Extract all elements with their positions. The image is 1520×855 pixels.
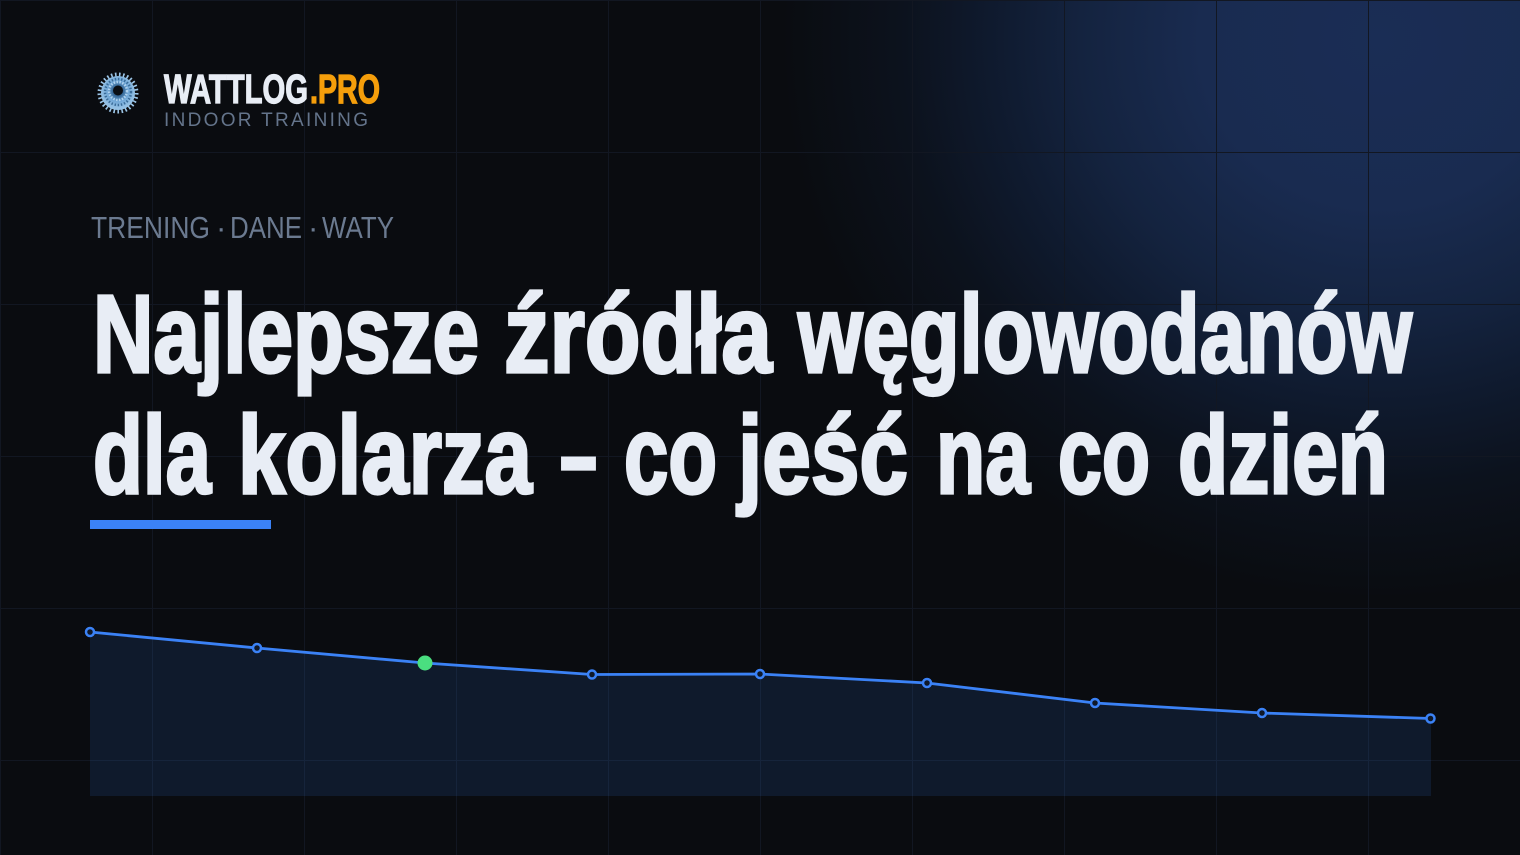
- title: na: [936, 394, 1031, 517]
- title: dzień: [1178, 394, 1388, 517]
- title: Najlepsze: [93, 273, 479, 396]
- logo tagline: INDOOR TRAINING: [164, 110, 368, 131]
- eyebrow: DANE: [230, 210, 302, 245]
- title: dla: [93, 394, 212, 517]
- eyebrow: ·: [216, 210, 226, 245]
- eyebrow: ·: [308, 210, 318, 245]
- chart line: [90, 632, 1431, 718]
- title: kolarza: [238, 394, 533, 517]
- eyebrow: TRENING: [91, 210, 210, 245]
- eyebrow: WATY: [322, 210, 394, 245]
- logo wordmark: WATTLOG: [164, 66, 308, 112]
- icon: bicycle cassette logo: [100, 74, 136, 112]
- title accent underline: [90, 520, 271, 529]
- eyebrow: [91, 210, 394, 245]
- title: źródła: [504, 273, 773, 396]
- chart markers: [86, 628, 1434, 722]
- highlighted marker: [418, 656, 432, 670]
- title: [93, 273, 1412, 517]
- chart area fill: [90, 632, 1431, 796]
- title: jeść: [736, 394, 908, 517]
- logo wordmark: .PRO: [310, 66, 380, 112]
- title: co: [624, 394, 717, 517]
- line chart: [86, 628, 1434, 796]
- title: co: [1058, 394, 1150, 517]
- title: –: [560, 394, 597, 517]
